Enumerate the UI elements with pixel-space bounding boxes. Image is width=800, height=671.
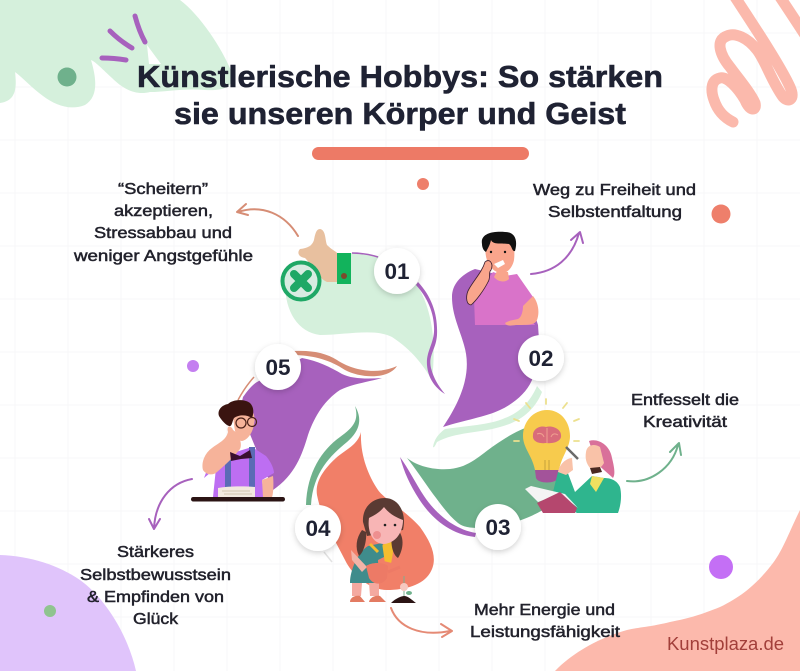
decorative dot: salmon small xyxy=(417,178,429,190)
decorative dot: lilac xyxy=(187,360,199,372)
number badge: 03 xyxy=(475,504,521,550)
arrow: to text 03 xyxy=(627,443,681,481)
number badge: 05 xyxy=(255,344,301,390)
panel: 04 petal xyxy=(306,406,434,603)
decorative dot: green on lilac xyxy=(44,605,56,617)
text: benefit 02: Weg zu Freiheit und xyxy=(533,182,696,199)
icon: girl watering plant xyxy=(350,498,416,603)
text: benefit 05 xyxy=(80,544,231,628)
text: benefit 01: Stressabbau und xyxy=(94,225,232,242)
text: benefit 05: Selbstbewusstsein xyxy=(80,567,231,584)
panel: 05 petal xyxy=(191,351,397,502)
text: benefit 03: Kreativität xyxy=(643,414,728,431)
text: benefit 05: Glück xyxy=(133,611,179,628)
brand wordmark: Kunstplaza.de xyxy=(667,634,784,654)
text: benefit 01 xyxy=(73,181,253,265)
panel: 02 petal xyxy=(433,232,542,447)
title underline bar xyxy=(312,147,529,160)
icon: boy with glasses at desk xyxy=(191,400,285,502)
text: benefit 04: Mehr Energie und xyxy=(474,602,615,619)
icon: purple sparkle strokes xyxy=(102,16,145,60)
text: benefit 01: weniger Angstgefühle xyxy=(73,248,253,265)
text: benefit 05: Stärkeres xyxy=(117,544,194,561)
title xyxy=(137,59,663,131)
text: benefit 04: Leistungsfähigkeit xyxy=(470,624,621,641)
decorative dot: salmon xyxy=(712,204,730,224)
text: benefit 05: & Empfinden von xyxy=(87,589,224,606)
text: benefit 04 xyxy=(470,602,621,641)
panel: 01 petal xyxy=(282,229,445,394)
number badge: 01: 01 xyxy=(384,259,410,284)
decorative blob: top-left green xyxy=(0,0,232,107)
number badge: 04 xyxy=(295,505,341,551)
number badge: 05: 05 xyxy=(265,355,291,380)
number badge: 02: 02 xyxy=(528,346,554,371)
number badge: 02 xyxy=(518,335,564,381)
icon: light bulb with brain xyxy=(514,399,579,482)
title: sie unseren Körper und Geist xyxy=(174,96,626,131)
arrow: to text 01 xyxy=(237,204,298,236)
decorative squiggle: top-right salmon xyxy=(712,0,800,122)
number badge: 01 xyxy=(374,248,420,294)
decorative blob: bottom-left lilac xyxy=(0,555,136,671)
number badge: 03: 03 xyxy=(485,515,511,540)
text: benefit 01: akzeptieren, xyxy=(114,203,213,220)
decorative dot: green xyxy=(58,68,76,86)
text: benefit 03: Entfesselt die xyxy=(631,392,739,409)
arrow: to text 02 xyxy=(531,232,583,274)
title: Künstlerische Hobbys: So stärken xyxy=(137,59,663,94)
decorative blob: bottom-right salmon xyxy=(555,510,800,671)
text: benefit 02 xyxy=(533,182,696,221)
icon: thinking man xyxy=(467,232,538,326)
arrow: to text 04 xyxy=(391,608,452,637)
arrow: to text 05 xyxy=(149,479,192,529)
text: benefit 01: “Scheitern” xyxy=(118,181,208,198)
panel: 03 petal xyxy=(400,399,621,537)
text: benefit 02: Selbstentfaltung xyxy=(548,204,682,221)
icon: thumb up xyxy=(298,229,351,284)
icon: cross badge xyxy=(282,262,320,300)
text: benefit 03 xyxy=(631,392,739,431)
number badge: 04: 04 xyxy=(305,516,331,541)
decorative dot: purple xyxy=(709,555,733,579)
icon: woman writing with book xyxy=(525,440,621,513)
